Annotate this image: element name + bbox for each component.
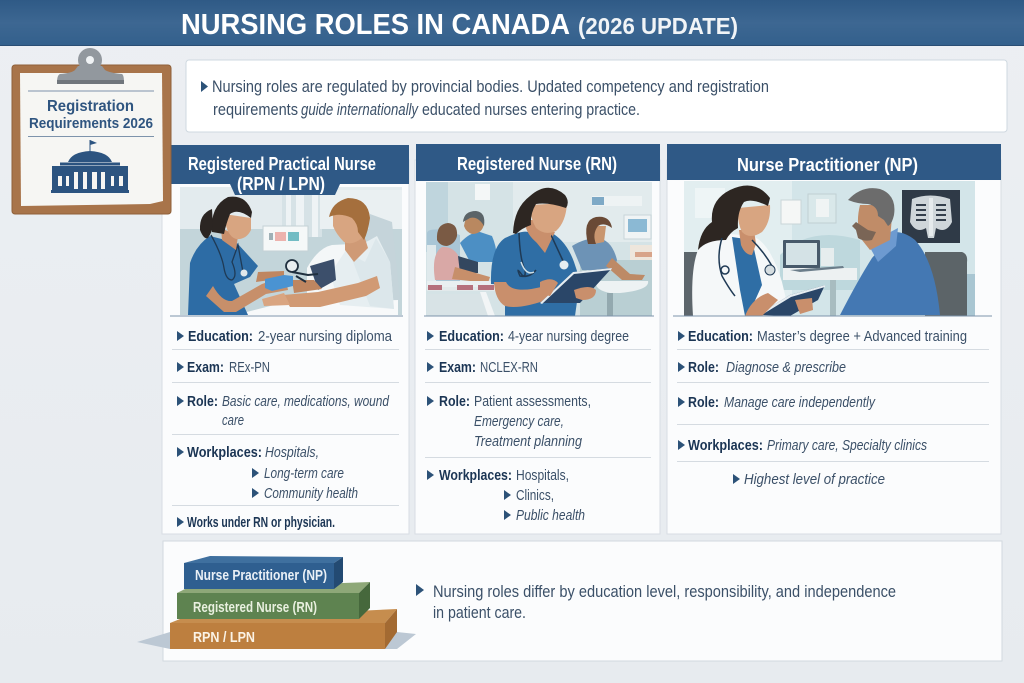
role details list: Hospitals,	[516, 467, 569, 484]
role details list: Diagnose & prescribe	[726, 359, 846, 376]
role details list: Education:	[188, 328, 253, 345]
role details list: Role:	[688, 394, 719, 411]
role details list	[172, 328, 399, 531]
role details list: Workplaces:	[439, 467, 512, 484]
main nurse	[491, 188, 612, 316]
background man	[460, 211, 496, 262]
icon: government building	[51, 140, 129, 193]
role details list: REx-PN	[229, 359, 270, 376]
intro callout: guide internationally	[301, 101, 419, 119]
summary text: Nursing roles differ by education level, responsibility, and independence	[433, 583, 896, 601]
role details list: Workplaces:	[688, 437, 763, 454]
clipboard: registration requirements: Registration	[47, 98, 134, 115]
intro callout: Nursing roles are regulated by provincial bodies. Updated competency and registration	[212, 78, 769, 96]
pyramid of roles	[137, 556, 416, 649]
role details list: Highest level of practice	[744, 471, 885, 488]
panel: Nurse Practitioner	[667, 144, 1001, 534]
desk	[783, 240, 857, 316]
tier: Registered Nurse: Registered Nurse (RN)	[193, 599, 317, 616]
role details list: Role:	[439, 393, 470, 410]
role details list: Role:	[688, 359, 719, 376]
role details list: care	[222, 412, 244, 429]
role details list	[425, 328, 651, 524]
role details list: Education:	[688, 328, 753, 345]
bed and sheet	[235, 244, 398, 315]
nurse	[188, 197, 318, 315]
role details list: Patient assessments,	[474, 393, 591, 410]
role details list: Manage care independently	[724, 394, 876, 411]
header banner: Nurse Practitioner (NP)	[737, 155, 918, 175]
patient	[262, 198, 394, 309]
tier: Nurse Practitioner	[184, 556, 343, 589]
header banner	[667, 144, 1001, 180]
panel: comparison summary	[137, 541, 1002, 661]
role details list: Basic care, medications, wound	[222, 393, 390, 410]
role details list: 4-year nursing degree	[508, 328, 629, 345]
role details list: Hospitals,	[265, 444, 319, 461]
intro callout: requirements	[213, 101, 298, 119]
role details list: Public health	[516, 507, 585, 524]
tier: RPN / LPN: RPN / LPN	[193, 629, 255, 646]
icon: metal clip	[57, 48, 124, 84]
tier: Nurse Practitioner: Nurse Practitioner (NP)	[195, 567, 327, 584]
role details list: 2-year nursing diploma	[258, 328, 393, 345]
bedside monitor	[263, 226, 308, 251]
title banner: NURSING ROLES IN CANADA	[181, 9, 570, 41]
illustration: nurse checking patient blood pressure	[180, 187, 402, 315]
illustration: nurse practitioner consulting patient	[684, 181, 975, 316]
nurse practitioner	[692, 186, 825, 316]
clipboard: registration requirements: Requirements 2026	[29, 115, 153, 132]
role details list: Role:	[187, 393, 218, 410]
tier: RPN / LPN	[170, 609, 397, 649]
role details list: Long-term care	[264, 465, 344, 482]
role details list: Treatment planning	[474, 433, 583, 450]
clipboard: registration requirements	[12, 48, 171, 214]
role details list: Workplaces:	[187, 444, 262, 461]
role details list: Clinics,	[516, 487, 554, 504]
panel: Registered Nurse	[415, 144, 660, 534]
role details list: Community health	[264, 485, 358, 502]
header banner with tab: (RPN / LPN)	[237, 174, 325, 194]
patient	[840, 188, 940, 315]
summary text: in patient care.	[433, 604, 526, 622]
role details list: Exam:	[187, 359, 224, 376]
role details list: NCLEX-RN	[480, 359, 538, 376]
title banner: (2026 UPDATE)	[578, 13, 738, 39]
intro callout	[186, 60, 1007, 132]
role details list: Education:	[439, 328, 504, 345]
header banner with tab	[171, 145, 409, 195]
intro callout: educated nurses entering practice.	[422, 101, 640, 119]
header banner: Registered Nurse (RN)	[457, 154, 617, 174]
tier: Registered Nurse	[177, 582, 370, 619]
role details list: Exam:	[439, 359, 476, 376]
panel: Registered Practical Nurse	[162, 145, 409, 534]
background patient	[434, 223, 490, 283]
role details list: Master’s degree + Advanced training	[757, 328, 967, 345]
background nurse	[572, 217, 645, 280]
summary text	[416, 583, 896, 622]
header banner with tab: Registered Practical Nurse	[188, 154, 376, 174]
role details list	[677, 328, 989, 488]
header banner	[416, 144, 660, 181]
title banner	[0, 0, 1024, 46]
x-ray	[902, 190, 960, 243]
role details list: Emergency care,	[474, 413, 564, 430]
role details list: Primary care, Specialty clinics	[767, 437, 927, 454]
illustration: nurse with clipboard in ward	[426, 182, 652, 316]
role details list: Works under RN or physician.	[187, 514, 335, 531]
